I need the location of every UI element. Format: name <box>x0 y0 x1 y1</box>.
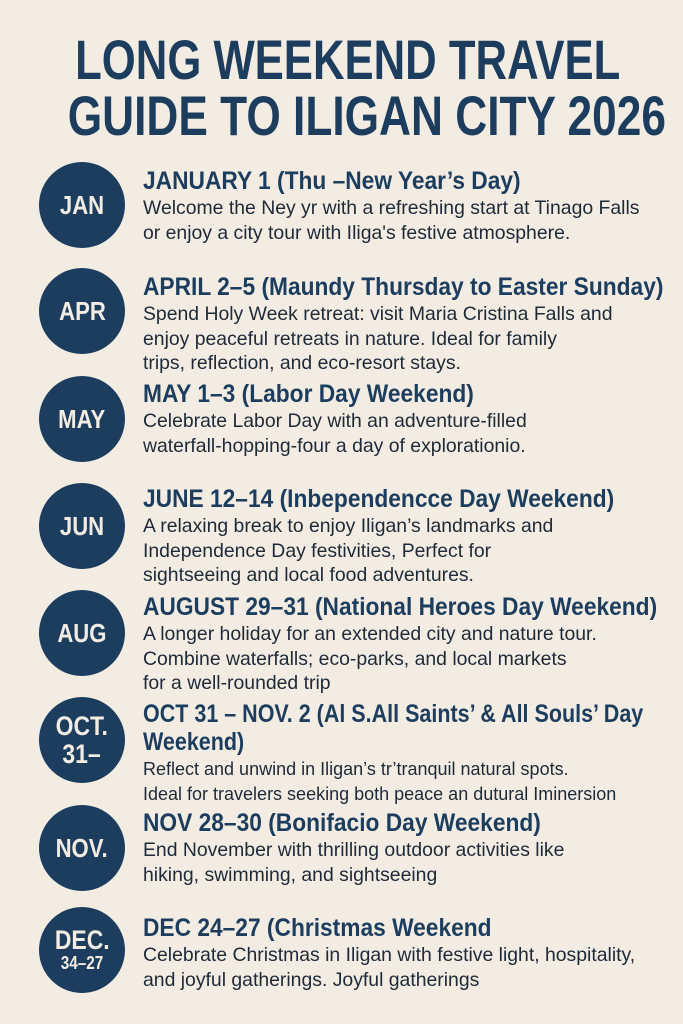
entry: April <box>143 273 663 374</box>
entry: October: Weekend) <box>143 728 244 756</box>
entry: June <box>143 485 614 586</box>
entry: May <box>143 380 527 456</box>
entry: April: APRIL 2–5 (Maundy Thursday to Easter Sunday) <box>143 273 663 301</box>
icon: NOV circle: NOV. <box>56 832 108 862</box>
icon: JUN circle: JUN <box>60 510 104 540</box>
entry: May: Celebrate Labor Day with an adventure-filled <box>143 410 527 432</box>
entry: October: Reflect and unwind in Iligan’s tr’tranquil natural spots. <box>143 759 569 779</box>
icon: APR circle <box>39 268 125 354</box>
entry: December <box>143 914 635 990</box>
icon: MAY circle <box>39 376 125 462</box>
icon: OCT circle: 31– <box>63 739 101 769</box>
entry: November: NOV 28–30 (Bonifacio Day Weekend) <box>143 809 541 837</box>
icon: JUN circle <box>39 483 125 569</box>
entry: October <box>143 700 643 804</box>
icon: APR circle: APR <box>59 296 105 326</box>
entry: November <box>143 809 564 886</box>
entry: April: trips, reflection, and eco-resort stays. <box>143 352 461 374</box>
entry: May: MAY 1–3 (Labor Day Weekend) <box>143 380 474 408</box>
icon: DEC circle: 34–27 <box>61 953 103 973</box>
icon: AUG circle <box>39 590 125 676</box>
icon: DEC circle <box>39 907 125 993</box>
icon: OCT circle: OCT. <box>56 711 108 741</box>
title <box>68 28 666 147</box>
icon: OCT circle <box>39 697 125 783</box>
entry: August: Combine waterfalls; eco-parks, and local markets <box>143 648 567 670</box>
entry: June: Independence Day festivities, Perfect for <box>143 540 491 562</box>
icon: JAN circle: JAN <box>60 190 104 220</box>
entry: April: Spend Holy Week retreat: visit Maria Cristina Falls and <box>143 303 613 325</box>
entry: June: A relaxing break to enjoy Iligan’s landmarks and <box>143 515 553 537</box>
title: GUIDE TO ILIGAN CITY 2026 <box>68 84 666 147</box>
entry: December: Celebrate Christmas in Iligan with festive light, hospitality, <box>143 944 635 966</box>
entry: June: JUNE 12–14 (Inbependencce Day Weekend) <box>143 485 614 513</box>
entry: November: End November with thrilling outdoor activities like <box>143 839 564 861</box>
entry: June: sightseeing and local food adventures. <box>143 564 474 586</box>
entry: October: OCT 31 – NOV. 2 (Al S.All Saints’ & All Souls’ Day <box>143 700 643 728</box>
entry: December: and joyful gatherings. Joyful gatherings <box>143 968 479 990</box>
entry: January: or enjoy a city tour with Iliga's festive atmosphere. <box>143 222 570 244</box>
entry: October: Ideal for travelers seeking both peace an dutural Iminersion <box>143 784 616 804</box>
entry: August: AUGUST 29–31 (National Heroes Day Weekend) <box>143 593 657 621</box>
entry: November: hiking, swimming, and sightseeing <box>143 864 437 886</box>
entry: January <box>143 167 639 244</box>
entry: December: DEC 24–27 (Christmas Weekend <box>143 914 492 942</box>
entry: August: for a well-rounded trip <box>143 672 331 694</box>
icon: DEC circle: DEC. <box>55 925 109 955</box>
icon: NOV circle <box>39 805 125 891</box>
entry: January: Welcome the Ney yr with a refreshing start at Tinago Falls <box>143 197 639 219</box>
icon: JAN circle <box>39 162 125 248</box>
icon: AUG circle: AUG <box>57 618 107 648</box>
entry: May: waterfall-hopping-four a day of explorationio. <box>143 434 526 456</box>
icon: MAY circle: MAY <box>58 404 106 434</box>
title: LONG WEEKEND TRAVEL <box>75 28 620 91</box>
entry: August: A longer holiday for an extended city and nature tour. <box>143 623 597 645</box>
entry: January: JANUARY 1 (Thu –New Year’s Day) <box>143 167 521 195</box>
entry: August <box>143 593 657 694</box>
entry: April: enjoy peaceful retreats in nature. Ideal for family <box>143 328 557 350</box>
